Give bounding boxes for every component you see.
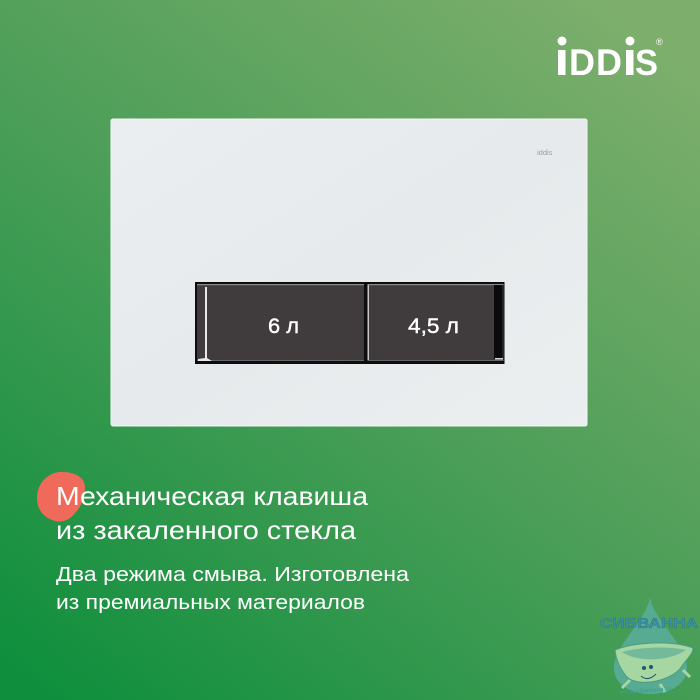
heading: Механическая клавиша — [56, 481, 369, 511]
body text: Два режима смыва. Изготовлена — [56, 564, 410, 586]
logo: iddis: D — [569, 42, 595, 83]
tub — [615, 643, 693, 682]
logo: iddis — [558, 36, 663, 83]
drop — [614, 597, 687, 694]
panel: flush plate — [111, 119, 587, 426]
tub feet — [622, 670, 690, 692]
face — [641, 665, 656, 679]
button: 4,5 l — [368, 284, 504, 361]
button: 4,5 l: 4,5 л — [408, 315, 459, 338]
button frame — [195, 282, 504, 364]
body text — [56, 564, 410, 614]
button: 6 l — [197, 284, 364, 361]
logo: iddis: D — [596, 42, 622, 83]
logo: iddis: S — [635, 42, 658, 83]
button: 6 l: 6 л — [268, 315, 299, 338]
heading — [56, 481, 369, 545]
name: СИБВАННА — [600, 616, 699, 632]
watermark: sibvanna — [600, 597, 699, 696]
body text: из премиальных материалов — [56, 592, 365, 614]
heading: из закаленного стекла — [56, 515, 357, 545]
coral accent blob — [37, 472, 85, 522]
website: www.sibvanna.ru — [619, 686, 672, 696]
plate small logo: iddis — [537, 148, 553, 157]
tub rim — [622, 648, 686, 659]
logo: iddis: ® — [656, 37, 663, 47]
